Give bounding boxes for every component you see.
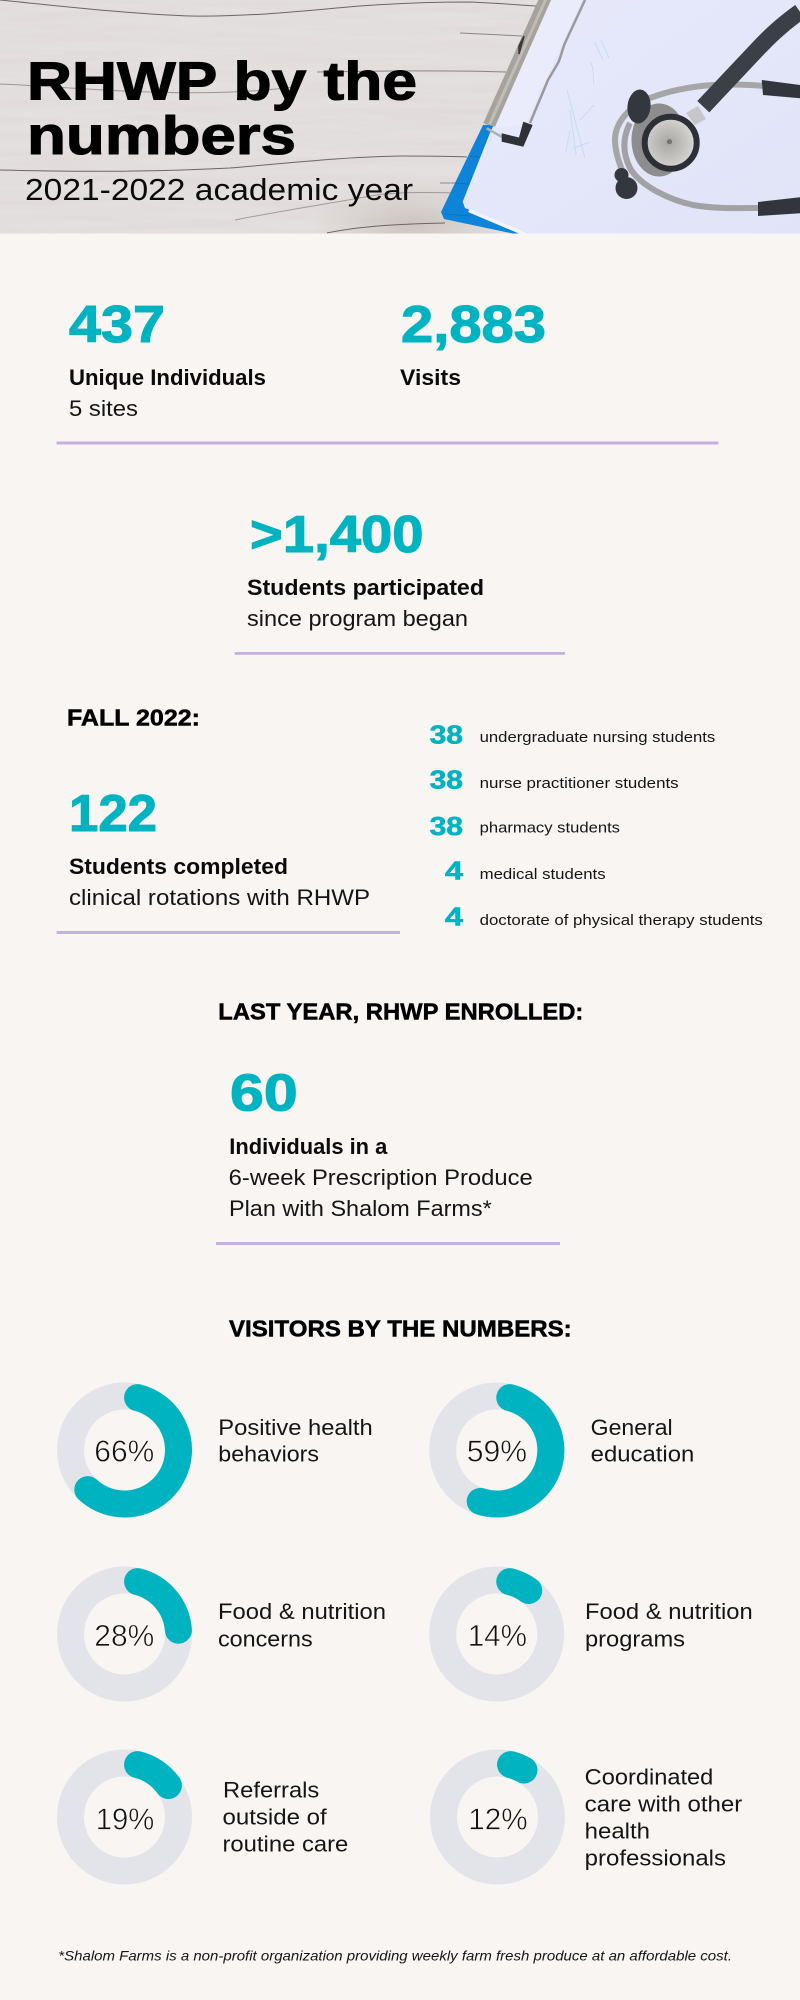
donut: 19% referrals outside of routine care: Referrals [223,1778,319,1803]
paper sheet [463,0,800,234]
donut: 28% food and nutrition concerns: concerns [218,1627,313,1652]
stat: 437 unique individuals [69,296,266,421]
heading: fall 2022: FALL 2022: [67,704,200,730]
student breakdown list: medical students [480,866,606,883]
stat: 60 individuals: 6-week Prescription Produce [229,1165,533,1190]
stat: 60 individuals: 60 [230,1065,298,1123]
donut: 66% positive health behaviors: behaviors [218,1442,319,1467]
student breakdown list: 38 [430,719,463,749]
student breakdown list: doctorate of physical therapy students [480,912,763,929]
stat: 2,883 visits [400,296,546,390]
heading: last year enrolled: LAST YEAR, RHWP ENROLLED: [218,998,583,1024]
student breakdown list: 4 [445,855,464,885]
donut: 14% food and nutrition programs: Food & nutrition [585,1599,753,1624]
donut: 59% general education: education [591,1442,694,1467]
student breakdown list: nurse practitioner students [480,775,679,792]
clip bar and wire [483,0,585,147]
stat: 60 individuals [229,1065,533,1221]
donut: 59% general education: 59% [467,1434,527,1469]
donut: 28% food and nutrition concerns: 28% [94,1618,154,1653]
stat: >1,400 students [247,506,484,631]
stat: 60 individuals: Individuals in a [229,1134,388,1159]
student breakdown list: undergraduate nursing students [480,729,715,746]
stat: >1,400 students: Students participated [247,575,484,600]
stat: 2,883 visits: Visits [400,365,461,390]
student breakdown list: 38 [430,765,463,795]
donut: 19% referrals outside of routine care: outside of [222,1805,328,1830]
footnote: *Shalom Farms is a non-profit organization providing weekly farm fresh produce at an affordable cost. [58,1948,732,1964]
donut: 14% food and nutrition programs: 14% [468,1618,527,1653]
donut: 28% food and nutrition concerns [70,1580,386,1688]
donut: 12% coordinated care: professionals [585,1846,726,1871]
donut: 14% food and nutrition programs [443,1580,753,1688]
clipboard board [441,124,529,234]
donut: 28% food and nutrition concerns: Food & nutrition [218,1599,386,1624]
donut: 19% referrals outside of routine care: 19% [96,1801,154,1836]
handwriting [566,40,609,158]
title: numbers [27,106,296,166]
stat: 122 students [69,785,370,910]
donut: 66% positive health behaviors: 66% [94,1434,154,1469]
donut: 19% referrals outside of routine care [70,1763,348,1871]
stat: 122 students: clinical rotations with RHWP [69,885,370,910]
subtitle: 2021-2022 academic year [25,172,413,207]
student breakdown list: 4 [445,901,464,931]
stat: 122 students: 122 [69,785,157,843]
stat: >1,400 students: >1,400 [250,506,424,564]
stat: 60 individuals: Plan with Shalom Farms* [229,1196,492,1221]
header photo: wood desk, clipboard and stethoscope [0,0,800,234]
title [27,52,417,166]
stethoscope [615,84,765,208]
donut: 59% general education: General [591,1415,673,1440]
student breakdown list: pharmacy students [480,820,620,837]
donut: 59% general education [443,1396,694,1504]
clip shadow stripe [543,0,552,18]
donut: 12% coordinated care: care with other [585,1792,742,1817]
donut: 66% positive health behaviors [70,1396,373,1504]
stat: 122 students: Students completed [69,854,288,879]
title: RHWP by the [27,52,417,112]
stat: 437 unique individuals: 5 sites [69,396,138,421]
donut: 12% coordinated care: Coordinated [585,1764,713,1789]
donut: 66% positive health behaviors: Positive health [218,1415,373,1440]
donut: 12% coordinated care [444,1763,742,1871]
donut: 12% coordinated care: 12% [468,1801,528,1836]
stat: 2,883 visits: 2,883 [401,296,546,354]
stat: >1,400 students: since program began [247,606,468,631]
heading: visitors by the numbers: VISITORS BY THE NUMBERS: [229,1316,572,1342]
student breakdown list: 38 [430,811,463,841]
stat: 437 unique individuals: Unique Individuals [69,365,266,390]
donut: 12% coordinated care: health [585,1819,650,1844]
donut: 19% referrals outside of routine care: routine care [222,1832,348,1857]
donut: 14% food and nutrition programs: programs [585,1627,685,1652]
student breakdown list [430,719,763,931]
stat: 437 unique individuals: 437 [69,296,165,354]
